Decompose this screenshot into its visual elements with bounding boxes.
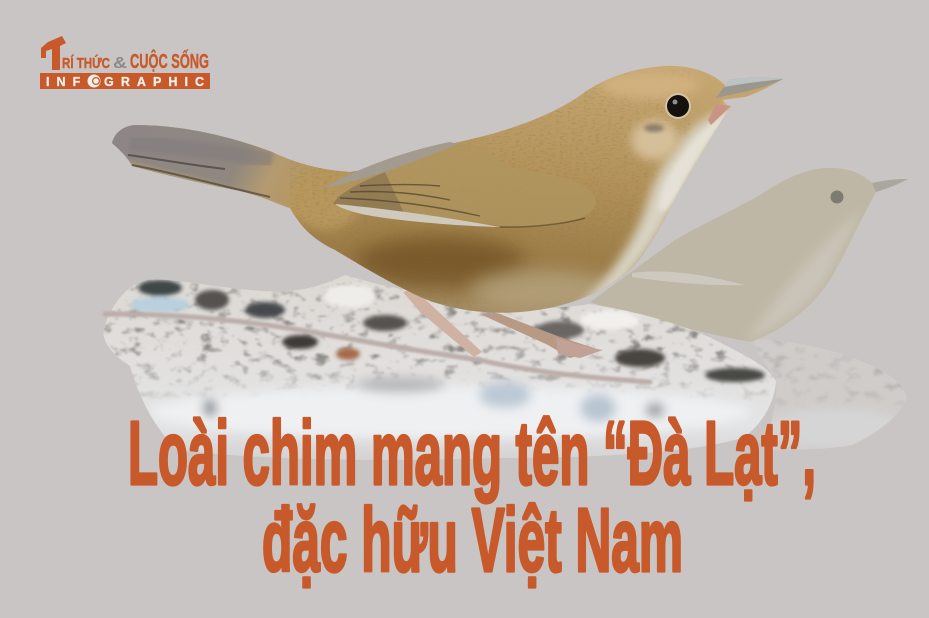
bird beak bbox=[708, 78, 783, 125]
logo wordmark: CUỘC SỐNG bbox=[130, 49, 209, 73]
title bbox=[128, 404, 816, 591]
logo bbox=[40, 36, 210, 89]
ground rock bbox=[100, 270, 780, 465]
logo wordmark: & bbox=[113, 55, 128, 72]
bird legs bbox=[403, 288, 603, 358]
logo target glyph bbox=[87, 74, 101, 88]
logo wordmark: RÍ THỨC bbox=[62, 54, 110, 72]
bird eye bbox=[665, 93, 691, 119]
bird body and tail bbox=[110, 60, 790, 320]
twig bbox=[105, 314, 650, 382]
logo wordmark bbox=[62, 49, 209, 73]
logo infographic bar bbox=[40, 73, 210, 89]
pale breast and throat bbox=[576, 102, 730, 300]
bird wing bbox=[323, 141, 595, 227]
rump blend bbox=[294, 211, 356, 232]
belly shading bbox=[355, 236, 525, 288]
cheek bbox=[631, 120, 679, 160]
feather texture bbox=[290, 70, 690, 315]
logo T mark bbox=[41, 36, 66, 70]
bird bbox=[110, 60, 790, 358]
logo: INFOGRAPHIC bbox=[46, 75, 204, 89]
ghost ground bbox=[764, 341, 901, 450]
ghost bird bbox=[590, 168, 908, 342]
